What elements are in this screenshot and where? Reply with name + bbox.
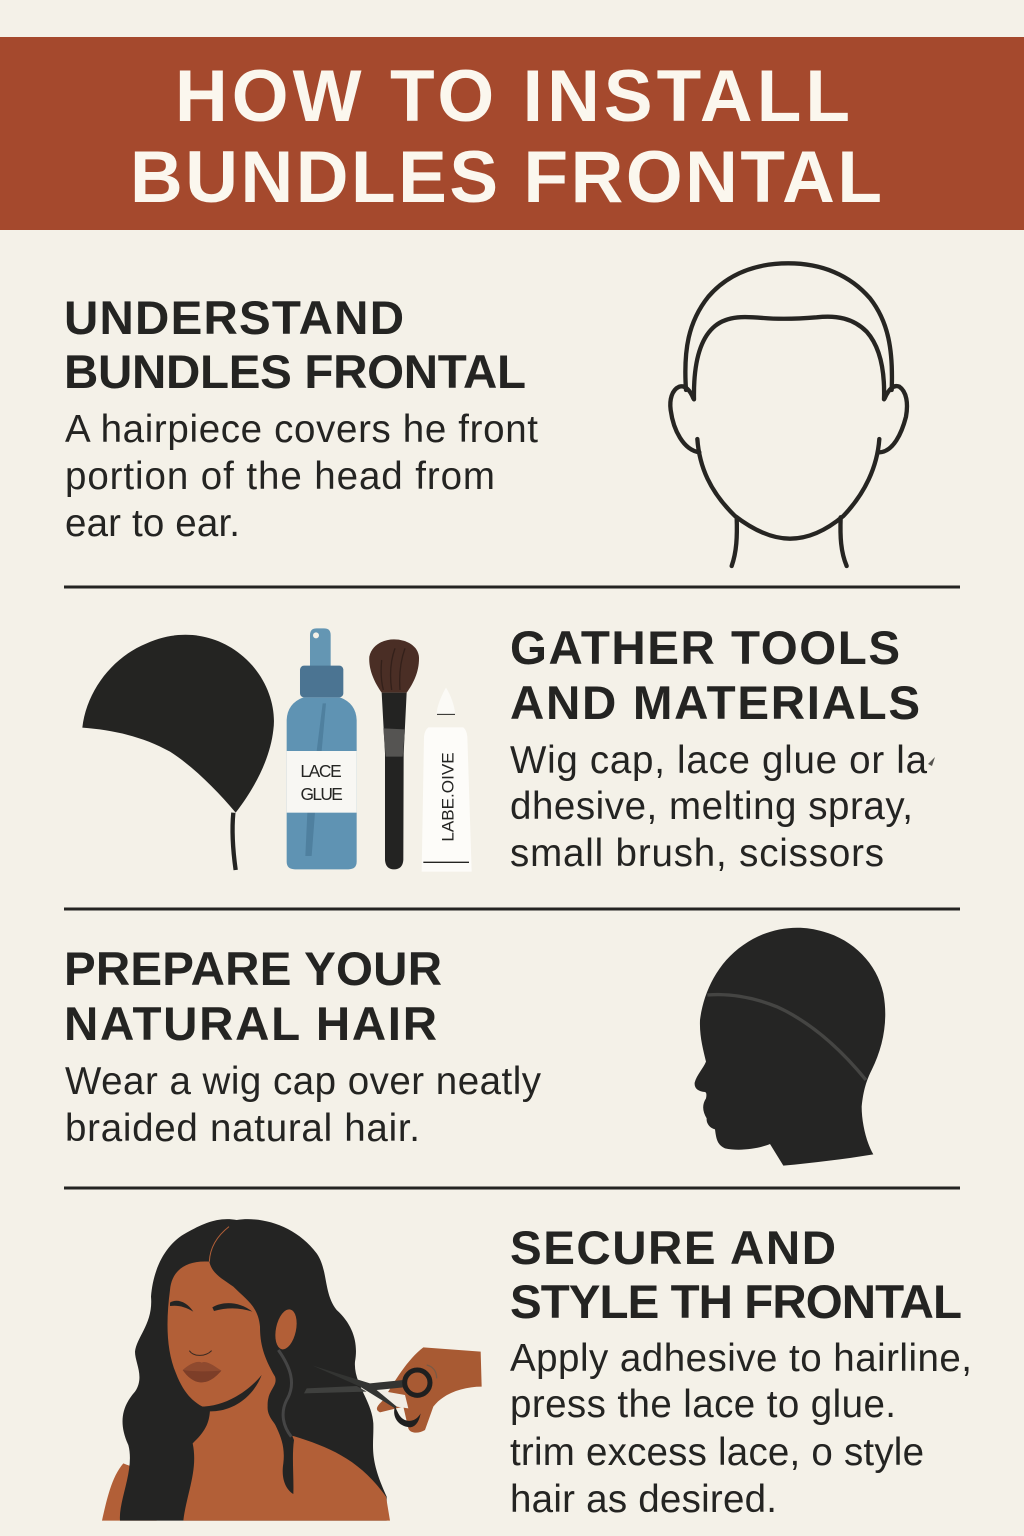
text block: adhesive instructions: Apply adhesive to hairline, [510, 1337, 972, 1380]
heading: understand bundles frontal: UNDERSTAND [64, 292, 404, 345]
icon: lace glue bottle: LACE [300, 761, 342, 781]
heading: prepare your natural hair [64, 943, 442, 1051]
illustration: hair [120, 1219, 387, 1521]
illustration: lips [183, 1362, 221, 1382]
illustration: jaw shadow [200, 1375, 262, 1411]
heading: secure and style the frontal: SECURE AND [510, 1222, 836, 1275]
text block: frontal description: ear to ear. [65, 502, 240, 545]
heading: gather tools and materials [510, 622, 920, 730]
illustration: back shoulder [102, 1463, 157, 1521]
illustration: eyebrows [170, 1301, 252, 1312]
icon: lace glue bottle [287, 628, 357, 869]
illustration: hair part [209, 1227, 229, 1262]
text block: wig cap instruction [65, 1060, 542, 1150]
title banner: BUNDLES FRONTAL [130, 137, 882, 218]
heading: gather tools and materials: AND MATERIALS [510, 677, 920, 730]
text block: adhesive instructions: hair as desired. [510, 1478, 777, 1521]
illustration: hand [377, 1347, 482, 1433]
text block: tools list: Wig cap, lace glue or la [510, 739, 928, 782]
icon: head outline [670, 263, 907, 566]
text block: adhesive instructions: press the lace to glue. [510, 1383, 896, 1426]
text block: adhesive instructions: trim excess lace, o style [510, 1431, 924, 1474]
illustration: face neck and chest [168, 1261, 390, 1521]
heading: understand bundles frontal: BUNDLES FRONTAL [64, 346, 526, 399]
illustration: ear [272, 1307, 300, 1351]
text block: frontal description: A hairpiece covers he front [65, 408, 538, 451]
heading: gather tools and materials: GATHER TOOLS [510, 622, 900, 675]
text block: wig cap instruction: Wear a wig cap over neatly [65, 1060, 542, 1103]
text block: tools list: dhesive, melting spray, [510, 785, 913, 828]
text block: frontal description: portion of the head from [65, 455, 495, 498]
text block: tools list [510, 739, 935, 875]
icon: head profile with wig cap [695, 928, 885, 1166]
text block: frontal description [65, 408, 538, 545]
illustration: scissors [304, 1366, 430, 1427]
text block: tools list: small brush, scissors [510, 832, 884, 875]
panel: gather tools and materials [82, 622, 935, 875]
heading: understand bundles frontal [64, 292, 526, 399]
icon: makeup brush [369, 639, 419, 869]
panel: secure and style the frontal [102, 1219, 972, 1521]
heading: secure and style the frontal: STYLE TH FRONTAL [510, 1276, 962, 1329]
icon: woman with long wavy hair and scissors [102, 1219, 482, 1521]
title banner: HOW TO INSTALL [175, 56, 850, 137]
text block: wig cap instruction: braided natural hair. [65, 1107, 420, 1150]
heading: secure and style the frontal [510, 1222, 962, 1329]
panel: understand bundles frontal [64, 263, 907, 566]
icon: adhesive tube: LABE.OIVE [438, 752, 457, 842]
panel: prepare your natural hair [64, 928, 885, 1166]
icon: lace glue bottle: GLUE [300, 784, 343, 804]
illustration: front strand [268, 1397, 294, 1494]
heading: prepare your natural hair: NATURAL HAIR [64, 998, 437, 1051]
icon: wig cap [82, 635, 274, 870]
title banner [0, 37, 1024, 230]
illustration: nose [189, 1351, 212, 1355]
icon: adhesive tube [422, 688, 472, 872]
heading: prepare your natural hair: PREPARE YOUR [64, 943, 442, 996]
text block: adhesive instructions [510, 1337, 972, 1521]
